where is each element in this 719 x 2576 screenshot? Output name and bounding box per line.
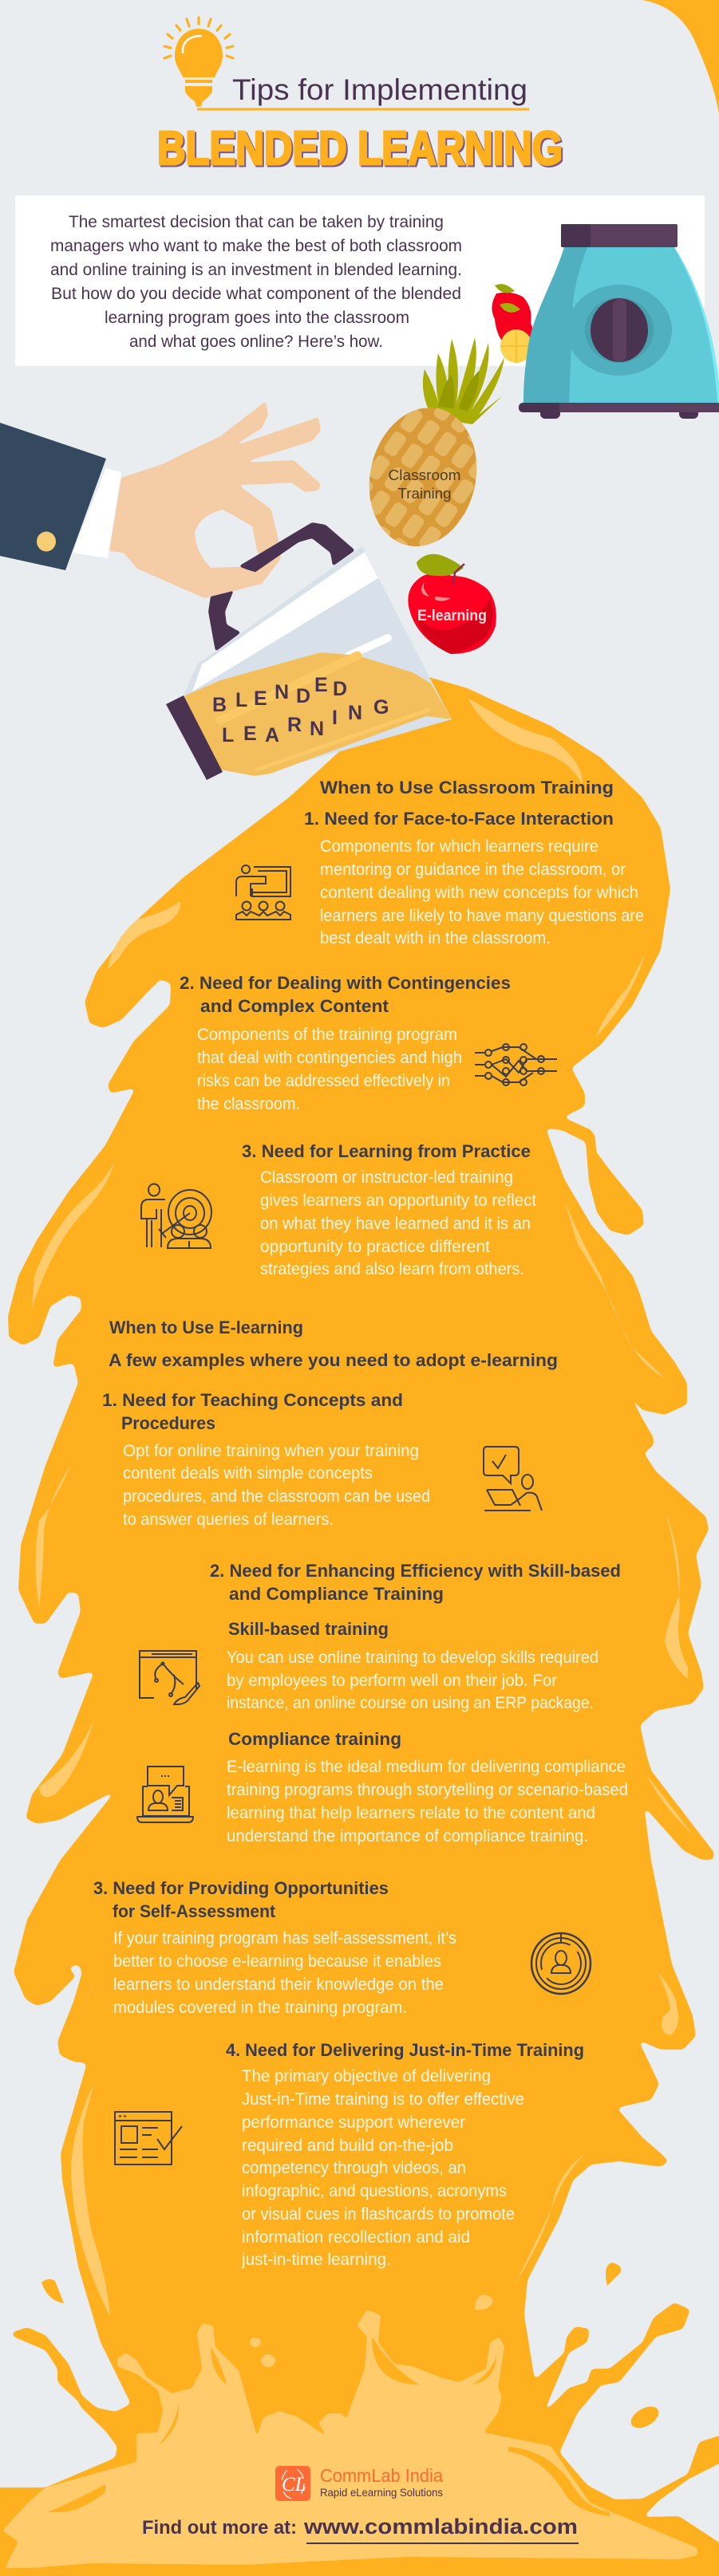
icon: hand holding the jar xyxy=(0,401,321,598)
item 2: contingencies and complex content: that deal with contingencies and high xyxy=(197,1049,462,1067)
item 1: face-to-face interaction: best dealt with in the classroom. xyxy=(320,929,551,947)
item 3: self-assessment: modules covered in the training program. xyxy=(113,1999,407,2017)
juice highlights xyxy=(32,698,693,2367)
icon: blender xyxy=(519,224,719,419)
item 3: self-assessment: learners to understand their knowledge on the xyxy=(113,1975,444,1994)
subheading: A few examples where you need to adopt e-learning xyxy=(109,1350,558,1370)
item 1: concepts and procedures: procedures, and the classroom can be used xyxy=(123,1487,430,1506)
item 4: just-in-time training: infographic, and questions, acronyms xyxy=(242,2182,507,2200)
logo: commlab india: CL xyxy=(282,2474,306,2495)
panel: introduction: The smartest decision that can be taken by training xyxy=(69,213,444,231)
section: when to use e-learning xyxy=(93,1318,628,2269)
heading: When to Use Classroom Training xyxy=(320,778,614,798)
logo: commlab india: CommLab India xyxy=(320,2465,443,2486)
item 4: just-in-time training: performance support wherever xyxy=(242,2113,465,2132)
logo: commlab india xyxy=(275,2465,443,2501)
call to action: www.commlabindia.com xyxy=(303,2515,578,2539)
icon: apple e-learning xyxy=(408,554,496,654)
top right corner swoosh xyxy=(642,0,719,114)
icon: target and learners xyxy=(141,1184,211,1248)
icon: network nodes xyxy=(475,1044,557,1085)
item 2: efficiency with skill-based and compliance training: and Compliance Training xyxy=(229,1584,444,1604)
item 2: contingencies and complex content: risks can be addressed effectively in xyxy=(197,1072,450,1090)
item 1: concepts and procedures: 1. Need for Teaching Concepts and xyxy=(102,1390,403,1410)
label: blended learning on jar: LEARNING xyxy=(222,696,389,746)
skill-based training text: You can use online training to develop skills required xyxy=(227,1648,599,1667)
compliance training text: E-learning is the ideal medium for delivering compliance xyxy=(227,1758,626,1776)
item 3: learning from practice: Classroom or instructor-led training xyxy=(260,1168,513,1187)
label: blended learning on jar xyxy=(212,674,389,746)
label: blended learning on jar: BLENDED xyxy=(212,674,347,716)
item 4: just-in-time training: 4. Need for Delivering Just-in-Time Training xyxy=(226,2040,584,2060)
item 1: face-to-face interaction: content dealing with new concepts for which xyxy=(320,884,638,902)
outer juice droplets xyxy=(41,2263,662,2432)
panel: introduction: and what goes online? Here’s how. xyxy=(129,333,383,351)
sleeve xyxy=(0,423,106,570)
compliance training text: Compliance training xyxy=(228,1729,401,1749)
item 2: contingencies and complex content xyxy=(180,973,511,1113)
icon: checklist window xyxy=(115,2112,182,2164)
icon: self-assessment circle xyxy=(531,1933,591,1994)
section: when to use classroom training xyxy=(141,778,644,1278)
heading: When to Use E-learning xyxy=(109,1318,303,1337)
item 1: concepts and procedures: Procedures xyxy=(121,1413,215,1433)
item 3: self-assessment: If your training program has self-assessment, it’s xyxy=(113,1929,456,1948)
heading: blended learning: BLENDED LEARNING xyxy=(157,122,563,175)
label: classroom training xyxy=(388,467,461,502)
item 3: learning from practice: opportunity to practice different xyxy=(260,1238,490,1256)
compliance training text xyxy=(227,1729,628,1845)
compliance training text: learning that help learners relate to the content and xyxy=(227,1804,595,1822)
splash shading xyxy=(48,2337,610,2516)
item 1: concepts and procedures xyxy=(102,1390,430,1529)
label: classroom training: Training xyxy=(397,486,452,502)
label: classroom training: Classroom xyxy=(388,467,461,483)
cufflink xyxy=(37,531,56,552)
item 4: just-in-time training: just-in-time learning. xyxy=(241,2251,391,2269)
item 4: just-in-time training: information recollection and aid xyxy=(242,2228,470,2247)
icon: laptop with profile and chat bubble xyxy=(137,1767,193,1822)
item 4: just-in-time training: The primary objective of delivering xyxy=(242,2067,491,2086)
item 1: concepts and procedures: to answer queries of learners. xyxy=(123,1511,334,1529)
call to action xyxy=(142,2515,579,2544)
juice stream background xyxy=(0,672,719,2576)
item 2: contingencies and complex content: 2. Need for Dealing with Contingencies xyxy=(180,973,511,993)
item 3: learning from practice xyxy=(242,1141,536,1278)
item 2: contingencies and complex content: and Complex Content xyxy=(200,996,389,1016)
item 4: just-in-time training: required and build on-the-job xyxy=(242,2137,453,2155)
icon: pineapple classroom training xyxy=(356,337,504,557)
item 4: just-in-time training: or visual cues in flashcards to promote xyxy=(242,2205,515,2223)
hand xyxy=(109,401,321,598)
item 1: concepts and procedures: content deals with simple concepts xyxy=(123,1464,373,1483)
item 3: self-assessment: for Self-Assessment xyxy=(113,1901,276,1921)
panel: introduction: managers who want to make the best of both classroom xyxy=(50,237,462,255)
cuff xyxy=(73,468,121,558)
compliance training text: understand the importance of compliance training. xyxy=(227,1827,588,1845)
skill-based training text: instance, an online course on using an ERP package. xyxy=(227,1694,594,1712)
icon: check speech bubble and laptop user xyxy=(484,1447,542,1511)
item 4: just-in-time training: competency through videos, an xyxy=(242,2159,466,2177)
skill-based training text: by employees to perform well on their job. For xyxy=(227,1672,557,1690)
item 1: face-to-face interaction: mentoring or guidance in the classroom, or xyxy=(320,861,626,879)
item 3: self-assessment xyxy=(93,1878,456,2017)
item 2: efficiency with skill-based and compliance training xyxy=(210,1561,621,1604)
heading: tips for implementing: Tips for Implementing xyxy=(232,73,527,106)
item 3: learning from practice: strategies and also learn from others. xyxy=(260,1260,524,1278)
juice splash at the bottom xyxy=(2,2310,697,2568)
item 1: face-to-face interaction: 1. Need for Face-to-Face Interaction xyxy=(304,809,614,829)
item 3: learning from practice: on what they have learned and it is an xyxy=(260,1215,531,1233)
title block xyxy=(157,18,564,176)
logo: commlab india: Rapid eLearning Solutions xyxy=(320,2486,443,2499)
item 1: concepts and procedures: Opt for online training when your training xyxy=(123,1442,419,1460)
icon: fruits behind the blender xyxy=(492,284,533,363)
skill-based training text xyxy=(227,1619,599,1712)
compliance training text: training programs through storytelling or scenario-based xyxy=(227,1781,628,1799)
item 2: contingencies and complex content: Components of the training program xyxy=(197,1026,457,1044)
panel: introduction xyxy=(15,195,705,366)
item 2: contingencies and complex content: the classroom. xyxy=(197,1095,300,1113)
item 3: self-assessment: better to choose e-learning because it enables xyxy=(113,1952,441,1971)
label: e-learning: E-learning xyxy=(417,608,487,624)
item 1: face-to-face interaction xyxy=(304,809,644,947)
icon: light bulb xyxy=(164,18,529,110)
item 4: just-in-time training: Just-in-Time training is to offer effective xyxy=(242,2090,524,2109)
icon: blender jar xyxy=(166,522,452,780)
item 1: face-to-face interaction: Components for which learners require xyxy=(320,837,599,856)
icon: design window with brush xyxy=(140,1651,200,1704)
panel: introduction: and online training is an investment in blended learning. xyxy=(50,261,462,279)
panel: introduction: But how do you decide what component of the blended xyxy=(51,285,461,303)
item 3: self-assessment: 3. Need for Providing Opportunities xyxy=(93,1878,389,1898)
item 2: efficiency with skill-based and compliance training: 2. Need for Enhancing Efficiency with Skill-based xyxy=(210,1561,621,1581)
footer xyxy=(142,2465,579,2544)
panel: introduction: learning program goes into the classroom xyxy=(105,309,409,327)
item 4: just-in-time training xyxy=(226,2040,584,2269)
heading: blended learning: BLENDED LEARNING xyxy=(159,124,564,176)
item 3: learning from practice: gives learners an opportunity to reflect xyxy=(260,1191,536,1210)
skill-based training text: Skill-based training xyxy=(228,1619,389,1639)
call to action: Find out more at: xyxy=(142,2517,297,2539)
item 3: learning from practice: 3. Need for Learning from Practice xyxy=(242,1141,531,1161)
icon: classroom presenter xyxy=(236,865,290,920)
item 1: face-to-face interaction: learners are likely to have many questions are xyxy=(320,907,644,925)
